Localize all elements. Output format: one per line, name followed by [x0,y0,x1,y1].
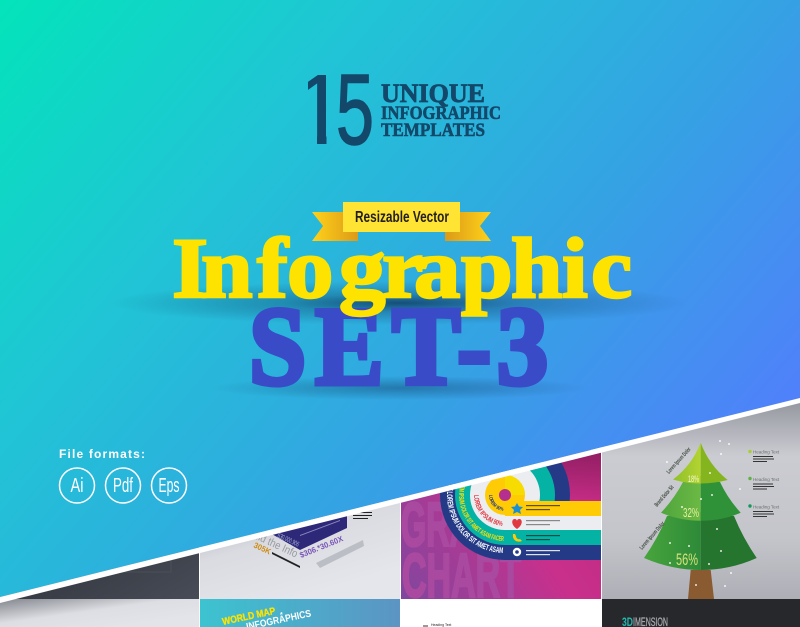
tree legend: Heading Text [753,477,780,482]
thumbnail: magenta arc chart: LOREM IPSUM DOLOR SIT AMET ASAM FACER [459,481,504,541]
tree top tier 18%: 18% [688,474,699,484]
title line: Infographic: Infographic [172,221,632,316]
file formats: Eps [158,475,180,497]
thumbnail row 2: world map [200,599,400,627]
thumbnail row 2: grey panel [0,599,199,627]
thumbnail: magenta arc chart: LOREM 90% [489,495,504,511]
thumbnail row 2: white panel: Heading Text [431,623,451,627]
file formats: File formats: [59,447,145,461]
file formats: Ai [70,475,84,497]
tree trunk [688,570,714,599]
thumbnail: 3D box chart [200,480,400,599]
thumbnail: dark panel [0,480,199,599]
tree side labels: Lorem Ipsum Dolor [639,521,667,551]
tree legend [748,450,780,517]
thumbnail: magenta arc chart: LOREM IPSUM 80% [474,495,502,526]
heading: 15 unique infographic templates: INFOGRAPHIC [381,103,501,124]
tree bottom tier 56%: 56% [676,550,698,569]
thumbnail row 2: 3Dimension [602,599,800,627]
tree legend: Heading Text [753,504,780,510]
heading: 15 unique infographic templates: 5 [336,54,374,166]
thumbnail: magenta arc chart: GRA [401,491,473,560]
file formats: Pdf [113,475,133,497]
heading: 15 unique infographic templates [308,74,500,146]
tree middle tier 32%: 32% [683,505,699,520]
heading: 15 unique infographic templates: TEMPLATES [381,120,485,141]
shadow under SET-3 [210,376,590,400]
thumbnail: Christmas tree chart [602,395,800,599]
tree side labels: Brand Dolor Sit [654,485,676,508]
tree legend: Heading Text [753,450,780,454]
tree side labels [639,447,693,551]
tree side labels: Lorem Ipsum Dolor [666,447,693,475]
thumbnail row 2: white panel [401,599,601,627]
thumbnail: 3D box chart: 630,000,906 [276,532,300,549]
tree middle tier 32% [661,476,741,521]
tree top tier 18% [673,443,728,484]
white diagonal band [0,398,800,603]
heading: 15 unique infographic templates: UNIQUE [381,79,485,108]
thumbnail: 3D box chart: 305K [252,541,272,557]
heading: 15 unique infographic templates: 1 [292,54,348,166]
thumbnail: 3D box chart: $306.*30.60X [298,534,345,560]
title line: SET-3: SET-3 [249,285,548,409]
thumbnail: 3D box chart: Build the Info [244,526,300,560]
shadow under Infographic [110,281,690,325]
file formats [59,447,186,503]
ribbon: Resizable Vector [312,202,491,241]
thumbnail: magenta arc chart: TEXT LOREM IPSUM DOLOR SIT AMET ASAM [447,484,504,553]
ribbon: Resizable Vector: Resizable Vector [355,209,449,226]
tree bottom tier 56% [644,512,757,570]
thumbnail: magenta arc chart [401,450,601,611]
thumbnail: magenta arc chart: CHART [402,542,521,611]
thumbnail row 2: world map: * [280,612,283,619]
